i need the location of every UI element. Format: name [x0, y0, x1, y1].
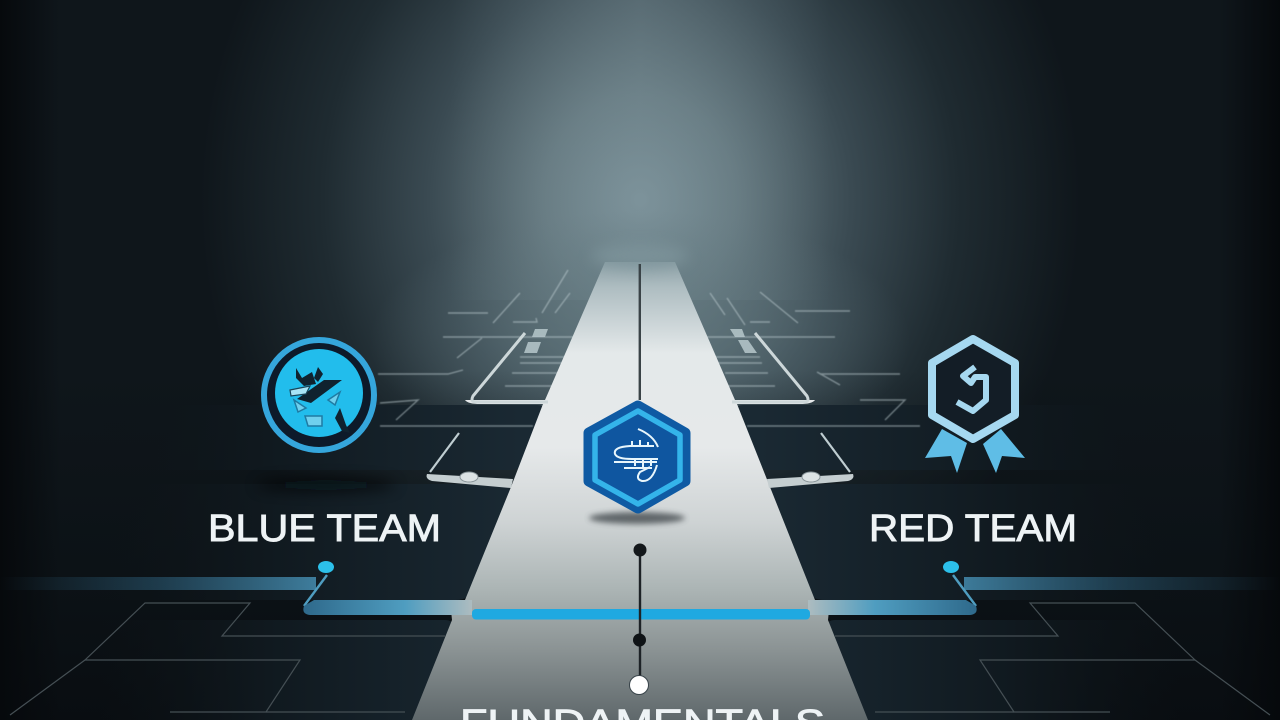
dark circuit panels left	[100, 405, 544, 720]
node lower	[633, 634, 646, 646]
small frames right	[732, 333, 853, 488]
node white	[630, 676, 648, 694]
icon: fundamentals hexagon badge	[589, 406, 685, 508]
icon shadow left	[256, 479, 396, 491]
small bright blocks left	[524, 329, 548, 353]
icon: red team ribbon badge	[925, 339, 1025, 473]
icon shadow center	[589, 512, 685, 524]
faint lower traces left	[10, 603, 445, 715]
label: red team: RED TEAM	[869, 508, 1077, 550]
label: blue team: BLUE TEAM	[208, 508, 441, 550]
small frames left	[427, 333, 548, 488]
icon: blue team circular badge	[264, 340, 374, 450]
vertical spine lower	[630, 544, 648, 694]
faint lower traces right	[835, 603, 1270, 715]
vertical spine upper	[639, 264, 641, 400]
haze over road top	[592, 244, 688, 268]
blue connector right	[808, 561, 1280, 615]
blue connector left	[0, 561, 472, 615]
central road	[412, 262, 868, 720]
small bright blocks right	[730, 329, 757, 353]
faint circuit traces left	[378, 270, 580, 426]
blue crossbar on road	[472, 609, 810, 620]
faint circuit traces right	[700, 292, 920, 426]
node upper	[634, 544, 646, 556]
dark circuit panels right	[736, 405, 1180, 720]
